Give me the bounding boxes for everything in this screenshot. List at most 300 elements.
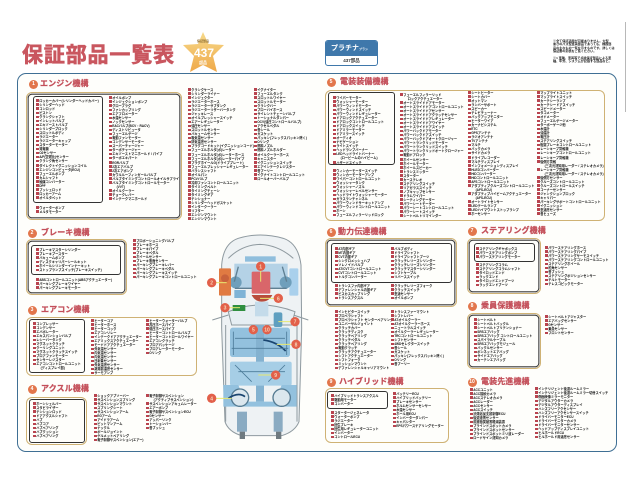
heading: axle: アクスル機構 [41,384,89,393]
list outside right: ニュートラルスイッチ [394,326,426,330]
heading: engine: エンジン機構 [40,79,89,88]
badge: 437 parts star: 437 [194,46,214,60]
dark inner frame [33,96,103,203]
list column 4: イグニッション [540,204,562,208]
list right [545,315,586,335]
list under box: ワイパーコントロールユニット [336,177,381,181]
list column 3: Gセンサー [149,414,164,418]
list right: バッテリーECU [396,392,419,396]
list column 3: インフォメーションディスプレイ [471,164,519,168]
list lower right: 車速センサー [394,292,413,296]
list column 2: サスペンションスプリング [97,398,135,402]
list column 2: インテークマニホールド [112,197,147,201]
list boxed right: ドライブシャフト [394,251,420,255]
list column 3: バックカメラ [471,147,490,151]
list column 2: パワートランクリッドスイッチ [403,145,448,149]
list column 3: ETC [471,127,478,131]
list column 3: HIDコンバーター [471,172,496,176]
list under box: タイロッドエンドブーツ [479,279,514,283]
list column 2: サスペンションマウント [97,402,132,406]
list column 4: マップライトユニット [540,91,572,95]
list column 4: 車速度センサー [540,208,562,212]
list left: ACCセンサー [473,404,493,408]
list outside left: プロペラシャフト センターベアリング [338,318,393,322]
list column 3: サイドカメラ [471,151,490,155]
list left: ロードサイン認知カメラ [473,436,508,440]
list boxed: ホイールシリンダーインナーキット [39,264,90,268]
list column 4: オドメーター [540,115,559,119]
list column 4: フューエルゲージメーター [540,119,578,123]
list right: ドライバーモニターカメラ [538,419,576,423]
list column 2: ヒーターホース [94,323,116,327]
list outside left: シフトアクチュエーター [338,354,373,358]
list left: ブラインドスポットカメラ [473,424,511,428]
list boxed: ドアミラーモーター [336,128,365,132]
list boxed: ダイレクトイグニッションコイル [39,164,87,168]
list column 4: コーナーセンサー [540,188,566,192]
list right: 各ブッシュ [548,270,564,274]
list column 3: ラジエーターホース [191,100,220,104]
list column 2: リアガラススイッチ [403,186,432,190]
list right: ブレーキ液面センサー [136,259,168,263]
list right: インテリジェント後退ルームミラー [538,387,589,391]
list boxed: ディスクキャリパーシールキット [39,260,87,264]
number 7 [468,226,476,236]
list column 4: ステアリングスイッチ [540,139,572,143]
list column 2: オイルポンプ [112,96,131,100]
list right: フロントセンサー [548,331,574,335]
list boxed: パワーステアリングポンプ [479,251,517,255]
gold frame [26,317,197,376]
list boxed: SRSエアバッグモジュール [477,342,515,346]
list boxed: ハザードスイッチ [336,160,362,164]
numbered markers: 4 [210,396,213,402]
list outside right: オイルクーラーレギュレーター [394,330,439,334]
list column 2: カーステレオ [403,178,422,182]
list column 3: エアーレギュレーター [191,120,223,124]
list boxed right: クラッチレリーズシリンダー [394,259,435,263]
list boxed: ワイパーモーター [336,96,362,100]
list boxed: ハブベアリング [36,426,58,430]
list column 3: マルチ [471,143,481,147]
gold frame [325,388,449,443]
list boxed: センサーレジスター [36,358,65,362]
list boxed: ラジエーターキャップ [39,139,71,143]
list right [545,246,609,286]
list column 3: 冷却ファンコントロールユニット [191,181,239,185]
list column 2: ホイールセンサー [403,158,429,162]
list column 4: ターボーゲージ他 [540,123,566,127]
list column 2: コンデンサーモーター [112,140,144,144]
list boxed: マグネットクラッチスイッチ [36,350,78,354]
list column 4: フューエルタンク [257,92,283,96]
section 9: hybrid [325,377,450,444]
list column 4: 燃料ノズルホルダー [257,148,286,152]
number 8: 8 [471,302,473,308]
list column 3: 油圧センサー [191,124,210,128]
list column 2: パワーシートスイッチ [403,210,435,214]
list column 4: レーンキープ警報機 [540,156,569,160]
list column 4: 後側方警報 [540,160,556,164]
list column 2: パワーバックドアオートクロージャー [403,137,457,141]
list column 3: アダプティブクルーズコントロールユニット [471,184,534,188]
list column 3: アッパーリンク [149,418,172,422]
list right: ホルムセンサーセンサー [396,404,431,408]
list column 2: ノブキャップセンサー [403,190,435,194]
list column 2 [94,394,144,442]
dark inner frame [29,399,85,443]
section 10: advanced electronics [467,377,617,442]
list boxed left [335,246,381,279]
list left: ブラインドスポットセンサー [473,428,515,432]
list right: パーキングブレーキレバー [136,263,174,267]
list boxed: シートベルト [477,318,496,322]
list right: パーキングブレーキスイッチ [136,271,177,275]
list outside left: クラッチペダル [338,338,360,342]
heading: hybrid: ハイブリッド機構 [339,377,404,386]
list column 2: オートスライドドアレギュレーター [403,117,454,121]
list boxed: DPF [39,184,46,188]
list boxed: パワーウィンドモーター [336,104,371,108]
dark inner frame [29,319,85,373]
list boxed left: CVT内部ギア [338,255,357,259]
list column 4: トーショナルダンパー [257,116,289,120]
list column 2: フューエルゲージ [112,132,138,136]
list boxed left: AT内部ギア [338,247,355,251]
list column 4: レーンキープコントロールユニット [540,151,591,155]
car body outline [212,235,308,436]
list column 3: シリンダーヘッドガスケット [191,201,233,205]
list boxed: ボンネットエアバッグ [477,350,509,354]
list column 3: 電子制御サスペンション [149,394,184,398]
list boxed: スターターモーター [39,143,68,147]
notes text: ※全て保証適用が可能ありません。大型 [553,39,609,43]
list boxed: コンデンサー [36,326,55,330]
list column 4: パーキングサポートコントロールユニット [540,200,601,204]
list column 4: 後側方センサー [540,176,562,180]
number 1: 1 [32,81,35,87]
list column 2: パワーシートモーター [403,202,435,206]
list boxed [33,322,81,370]
list column 2: 水温センサー [112,116,131,120]
list column 4 [537,91,604,216]
list column 2: エアミックスアクチュエーター [94,339,138,343]
list column 2: ノックセンサー [112,120,134,124]
list outside left: クラッチベアリング [338,334,367,338]
list under box: パーキングブレーキワイヤー [39,282,80,286]
list boxed: プッシュロッド [39,188,62,192]
list boxed: ハブコア [36,422,49,426]
list column 2: EACバルブ(BCV・RACV) [112,124,150,128]
list right: ホイールセンサー [136,255,162,259]
list left: ACCスイッチ [473,408,493,412]
list right: ブレーキペダル [136,251,158,255]
list boxed: スタビライザー [36,406,58,410]
list column 2: ヒーターコック [94,327,116,331]
list column 3: シートカバー [471,95,490,99]
list column 2: 外気温センサー [94,347,116,351]
list column 2 [109,96,179,201]
numbered markers: 8 [295,342,298,348]
list lower left: トランスアクスル [338,296,363,300]
list left [470,388,524,440]
list column 2: サーモアンプ [94,371,113,375]
list column 2: オートスライドドアセンサー [403,109,445,113]
list boxed: マグネットクラッチ [36,342,65,346]
list boxed: エアコンコントロールユニット [36,362,81,366]
list right: EPSパワーステアリングモーター [396,424,444,428]
notes text [553,39,615,63]
list under box: メルタモーター [39,210,62,214]
list outside left: クラッチディスク [338,330,363,334]
list lower right: オイルポンプ [394,296,413,300]
list column 2: ヒーターコア [94,319,113,323]
list column 2: モードドアアクチュエーター [94,343,135,347]
section 4: axle [26,384,197,445]
list column 4: ジャンクションブロック [540,192,575,196]
list boxed left: トルクコンバーター [338,275,367,279]
list column 4: 油温計 [540,131,550,135]
list column 2: オートスライドドアスイッチ [403,125,445,129]
list column 2: フューエルフィラーリッド [403,93,441,97]
list column 3: シリンダーライナー [191,92,220,96]
list boxed: エンジンコンピュータ(ECU) [39,168,80,172]
list right: ヒルホールド用速度センサー [538,435,580,439]
list column 2: パワーシートコントロールユニット [403,206,454,210]
list under box [476,262,521,287]
list column 2: ロックアクチュエーター [408,97,442,101]
section 6: powertrain [325,226,457,370]
list column 4: OCV(油圧コントロールバルブ) [257,120,301,124]
list outside right: ATオイルクーラー [394,318,421,322]
list column 2: スプリングシート [97,406,123,410]
list boxed left: シンクロメッシュハブ [338,259,370,263]
list column 4: オイルクーラーホース [257,152,289,156]
number 3 [28,306,36,314]
list column 2: ドラムワイパー [403,194,425,198]
list column 3: 排気温度センサー [191,140,217,144]
list right: ドライバーモニターECU [538,415,574,419]
list column 3: オットマン [471,99,487,103]
list under box: ABSコントロールユニット(ABSアクチュエーター) [39,278,112,282]
list right: ブレーキホース [136,243,158,247]
number 6 [326,228,336,236]
list column 3: トーションバー [149,422,171,426]
numbered markers: 1 [259,264,262,270]
list column 2: 内気温センサー [94,355,116,359]
list column 3: 吸気温センサー [191,136,214,140]
list right: ハイブリッドバッテリー [396,396,431,400]
gold frame [325,90,605,221]
list column 2 [91,318,142,375]
list boxed: ラジエーター [39,135,58,139]
list outside right: ATオイルクーラーホース [394,322,430,326]
list outside left: プロペラシャフト [338,314,364,318]
list boxed: サイドエアバッグ [477,354,503,358]
list right: ホール用ECU [396,412,416,416]
list boxed left: AT/CVTコントロールユニット [338,267,381,271]
list column 3: LEDテールランプ [471,204,497,208]
heading: electrical: 電装装備機構 [340,77,389,86]
number 8 [468,302,476,310]
list right: テレスコピックモーター [548,282,583,286]
list column 3: HLEDコンバーター [471,168,499,172]
list under box: パワーウィンドサーキットアンプ [336,201,384,205]
list boxed: ナビゲーション [336,140,358,144]
gold frame [26,239,127,295]
list column 3: プラグコードキット(イグニッションコード) [191,144,254,148]
heading: advanced: 電装先進機構 [481,377,530,386]
list column 3: ドライブレコーダー [471,156,500,160]
list boxed right: クラッチマスターシリンダー [394,267,436,271]
list under box [333,168,390,217]
list right: 水温センサー [396,408,415,412]
list column 3: ジャッキレース [191,112,213,116]
main panel [17,73,617,452]
list under box: パーキングブレーキモーター [39,286,81,290]
list boxed: ピストン [39,111,52,115]
list column 4: パッキン(フレックスパッキン除く) [257,136,307,140]
list column 4: イグナイトコントロールユニット [257,173,305,177]
list outside right [391,310,444,366]
list right: インバーターダンパー [396,416,428,420]
list under box [331,411,379,439]
notes text: 重さのパス型車両部品であっても、機器部 [553,42,611,46]
number 10 [468,378,476,386]
number 5 [326,78,336,86]
list boxed: パワーウィンドスイッチ [336,108,371,112]
list under box: ガラスランチャンネル [336,197,368,201]
list right: チルトモーター [548,278,570,282]
list column 3 [188,88,254,221]
list column 4: キャリパー [540,196,556,200]
list boxed right: バルブボディ [394,247,413,251]
badge: platinum plan: プラチナプラン [331,45,368,52]
list column 4: マップライトスイッチ [540,95,572,99]
list boxed: クランク角センサー [39,159,68,163]
list right: ステアリングポジションセンサー [548,274,596,278]
list boxed: ライトスイッチ [336,144,358,148]
list column 2: 外気温度センサー [94,363,120,367]
list column 2: エアコンリレー [94,331,116,335]
list column 2: シーティングモーター [403,198,435,202]
gold frame [26,397,87,445]
list column 4: 衝突ブレーキコントロールユニット [540,143,591,147]
list column 3: リフター [191,209,204,213]
list column 4: 各シール [257,128,270,132]
list left: 後退連携センサー [473,416,499,420]
list column 2: パワートランクリッドオートクロージャー [403,149,464,153]
list outside left: ユニバーサルジョイント [338,322,373,326]
list column 2: オートスライドドアモーター [403,101,445,105]
list outside right: 4WDセレクタースイッチ [394,342,430,346]
list boxed: (ディスプレイ部) [41,366,65,370]
list column 2: チョークレバー [112,193,134,197]
list column 2: パワーバックドアモーター [403,129,441,133]
list column 2: エキゾーストマニホールド / パイプ [112,152,162,156]
list right: 乗員センサー [548,327,567,331]
list boxed: LEDヘッドライトバーナー [336,152,374,156]
list boxed right: クラッチレリーズシリンダー [394,263,435,267]
list boxed: ドアロックスイッチ [336,124,365,128]
list boxed: バックルセンサー [477,346,503,350]
list right: プロポーショニングバルブ [136,239,174,243]
numbered markers [207,262,301,403]
badge: 437 parts star: 保証部品 [197,38,209,43]
list column 2: スターター [403,174,419,178]
list right: パワーステアリングサーモスイッチ [548,254,599,258]
list boxed: ドアアクスルシャフト [36,414,68,418]
heading: steering: ステアリング機構 [481,226,546,235]
list boxed: テンションロッド [36,410,62,414]
list column 3: ラジオアンテナ [471,135,493,139]
list boxed: エバポレーター [36,330,58,334]
list column 2: ボールジョイント [97,430,123,434]
list right: ドライバーモニターセンサー [538,423,580,427]
list column 3: クランクケース [191,88,213,92]
list column 4: Oリング [257,140,269,144]
number 1 [29,80,38,89]
list outside left [335,310,393,370]
list right: シートベルトアジャスター [548,315,586,319]
list column 3 [146,394,197,430]
numbered markers: 2 [210,281,213,287]
list column 4: 各プーリー [257,169,273,173]
list column 4: カーテシーランプ [540,99,566,103]
list column 2: 内気温センサー [94,351,116,355]
list column 4: 各ヒューズ [540,212,556,216]
list column 4: (三次元認知用レーダー / ステレオカメラ) [545,164,604,168]
list column 2: バルブタイミングコントロールオイルサプライ [112,177,179,181]
numbered markers: 5 [252,328,255,334]
list left: ACCユニット [473,388,493,392]
list column 3: オイルプレッシャースイッチ [191,116,232,120]
list left: 渋滞追従支援制御ECU [473,412,505,416]
list boxed: ロッカーアーム [39,192,61,196]
list outside right: シフトレバー [394,314,413,318]
dark inner frame [327,391,388,409]
list boxed: フューエルポンプ [39,172,65,176]
list outside left: デファレンシャルキャリアマウント [338,366,389,370]
list column 2: 2次エアポンプ [112,169,133,173]
list boxed: インレットバルブ [39,119,65,123]
list column 4: レーンキープ警報機 [540,168,569,172]
list lower left: トランスファ内部ギア [338,284,370,288]
list column 3: バキュームセンサー [191,132,220,136]
list boxed: ストップランプスイッチ(ブレーキスイッチ) [39,268,102,272]
list boxed right: リバーススイッチ [394,275,420,279]
list outside right: 各シール [394,346,407,350]
list outside right: シフトセンサー [394,338,416,342]
list boxed: ヘッドランプバーナー [336,148,368,152]
list outside left: クラッチアクチュエーター [338,350,376,354]
list column 2: (VVT) [117,185,125,189]
list boxed right: シフトケーブル [394,271,416,275]
list column 3: PCVバルブ [191,177,207,181]
list column 3: バランスシャフト [191,169,217,173]
list right: パワーステアリングホース [548,246,586,250]
list column 4: イグナイター [257,88,276,92]
list column 3: カーナビシステム [471,123,497,127]
list boxed: シートベルトプリテンショナー [477,326,522,330]
list boxed: SRSエアバッグ コントロールユニット [477,334,532,338]
list under box: ラックエンドブーツ [479,283,508,287]
list under box: ウィンカーモーターアンプ [336,173,374,177]
list outside right: パッキン(フレックスパッキン除く) [394,354,444,358]
list column 4: イグニッションスイッチ [257,161,292,165]
gold frame [26,92,182,220]
list column 3 [468,90,534,216]
